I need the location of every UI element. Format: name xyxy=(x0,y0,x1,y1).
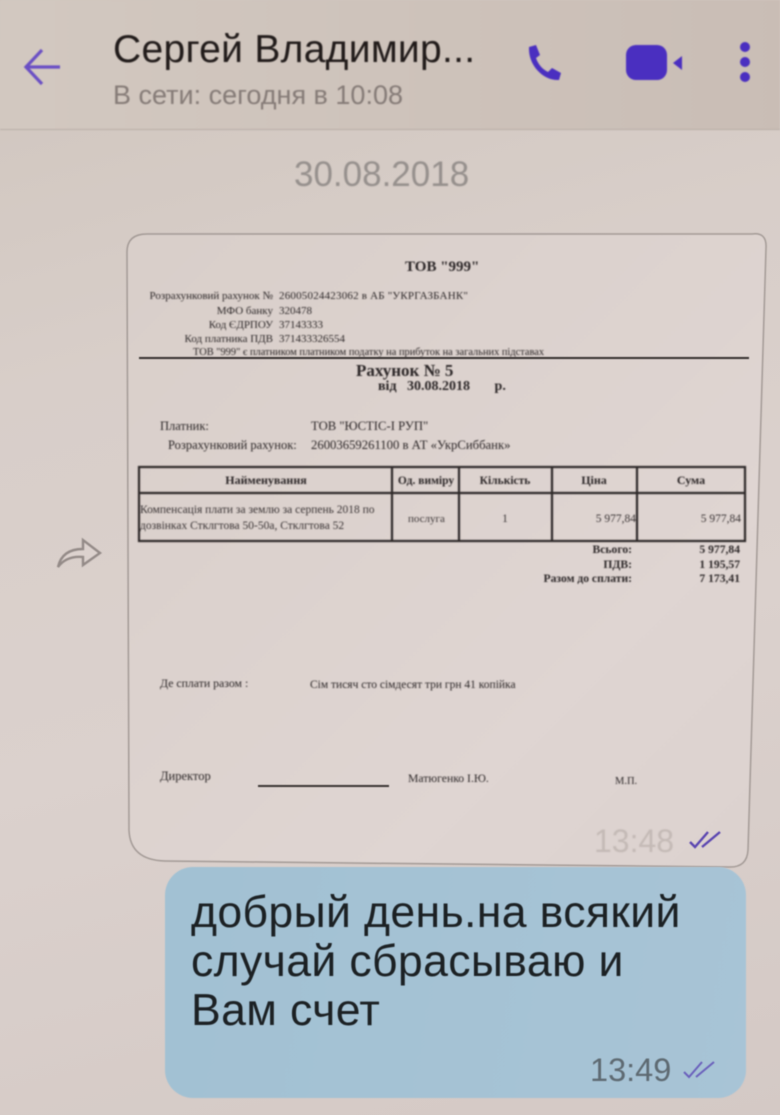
payer details: Платник: xyxy=(160,419,209,433)
bank details: 37143333 xyxy=(279,319,323,331)
invoice totals: 7 173,41 xyxy=(699,572,740,585)
icon: menu dots xyxy=(739,41,751,83)
amount in words: Де сплати разом : xyxy=(160,676,248,690)
invoice totals: ПДВ: xyxy=(603,558,632,571)
invoice company title: ТОВ "999" xyxy=(405,259,479,275)
header rule xyxy=(139,357,749,359)
payer details: 26003659261100 в АТ «УкрСиббанк» xyxy=(311,438,510,452)
icon: phone xyxy=(528,44,562,81)
invoice table: Найменування xyxy=(225,473,307,487)
bank details: МФО банку xyxy=(217,305,273,317)
bank details xyxy=(150,290,544,358)
panel: text message bubble xyxy=(165,867,746,1098)
invoice message time: 13:48 xyxy=(594,823,674,859)
signature block: Директор xyxy=(160,769,211,783)
invoice number: Рахунок № 5 xyxy=(356,361,453,380)
bank details: 371433326554 xyxy=(279,333,345,345)
message text: добрый день.на всякий xyxy=(191,888,681,937)
invoice table xyxy=(136,464,748,544)
invoice table: послуга xyxy=(408,513,445,525)
message text: Вам счет xyxy=(191,986,380,1035)
icon: video camera xyxy=(625,44,683,81)
invoice date: від 30.08.2018 р. xyxy=(378,379,506,394)
date label: 30.08.2018 xyxy=(294,155,469,194)
invoice table: Сума xyxy=(677,473,705,487)
online status: В сети: сегодня в 10:08 xyxy=(113,80,403,110)
signature block: М.П. xyxy=(615,776,637,787)
icon: read ticks on message xyxy=(683,1061,715,1079)
message text xyxy=(190,888,681,1035)
signature block xyxy=(159,769,638,788)
signature block: Матюгенко І.Ю. xyxy=(408,772,489,785)
invoice totals: Разом до сплати: xyxy=(544,572,632,585)
bank details: Розрахунковий рахунок № xyxy=(150,290,273,302)
invoice totals: 1 195,57 xyxy=(699,558,740,571)
invoice table: Од. виміру xyxy=(398,475,454,487)
icon: forward arrow xyxy=(56,538,102,568)
invoice table: 5 977,84 xyxy=(596,513,636,525)
bank details: 26005024423062 в АБ "УКРГАЗБАНК" xyxy=(279,290,468,302)
invoice table: 5 977,84 xyxy=(701,513,741,525)
invoice table: Компенсація плати за землю за серпень 2018 по xyxy=(140,504,375,516)
invoice totals: 5 977,84 xyxy=(699,543,740,556)
amount in words: Сім тисяч сто сімдесят три грн 41 копійка xyxy=(310,679,516,691)
invoice table: 1 xyxy=(502,513,508,525)
message time: 13:49 xyxy=(590,1052,671,1088)
amount in words xyxy=(159,676,516,692)
bank details: Код ЄДРПОУ xyxy=(209,319,273,331)
message text: случай сбрасываю и xyxy=(191,937,624,986)
payer details: ТОВ "ЮСТІС-І РУП" xyxy=(311,419,428,433)
invoice totals xyxy=(543,543,741,585)
contact name: Сергей Владимир... xyxy=(113,28,475,71)
invoice table: Кількість xyxy=(480,475,530,487)
icon: back arrow xyxy=(23,48,61,86)
payer details xyxy=(160,419,510,452)
header bar xyxy=(0,0,780,130)
payer details: Розрахунковий рахунок: xyxy=(168,438,297,452)
invoice table: дозвінках Стклгтова 50-50а, Стклгтова 52 xyxy=(140,520,344,532)
icon: read ticks on invoice xyxy=(688,830,722,850)
bank details: Код платника ПДВ xyxy=(185,333,273,345)
invoice totals: Всього: xyxy=(593,543,632,556)
bank details: ТОВ "999" є платником платником податку на прибуток на загальних підставах xyxy=(193,347,544,358)
bank details: 320478 xyxy=(279,305,312,317)
invoice table: Ціна xyxy=(581,473,607,487)
